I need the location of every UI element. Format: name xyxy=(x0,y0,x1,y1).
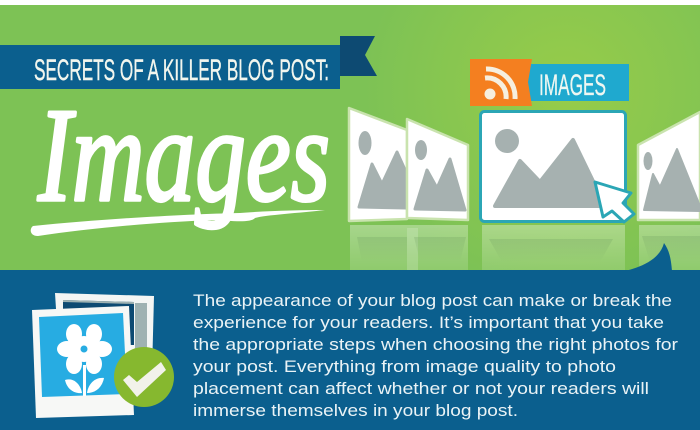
intro paragraph: The appearance of your blog post can make or break the xyxy=(193,291,672,310)
script heading: Images: Images xyxy=(37,81,330,229)
image frame: right xyxy=(638,112,700,220)
icon: cursor arrow xyxy=(595,182,634,222)
icon: photos with flower and check xyxy=(32,293,174,418)
title banner: SECRETS OF A KILLER BLOG POST: xyxy=(34,54,329,87)
intro paragraph xyxy=(193,291,678,420)
intro paragraph: experience for your readers. It’s important that you take xyxy=(193,313,664,332)
intro paragraph: placement can affect whether or not your readers will xyxy=(193,379,649,398)
tag: RSS images label xyxy=(470,59,629,106)
intro paragraph: the appropriate steps when choosing the right photos for xyxy=(193,335,678,354)
image frame: left two xyxy=(407,119,468,220)
intro paragraph: immerse themselves in your blog post. xyxy=(193,401,518,420)
panel: blue intro background xyxy=(0,243,700,430)
icon: flower xyxy=(57,324,112,396)
tag: RSS images label: IMAGES xyxy=(539,69,606,102)
image frame: center highlighted xyxy=(480,112,626,222)
image frame: left one xyxy=(349,108,407,221)
intro paragraph: your post. Everything from image quality to photo xyxy=(193,357,616,376)
title banner xyxy=(0,36,377,89)
panel: green header background xyxy=(0,5,700,270)
reflections of image frames xyxy=(350,225,700,270)
